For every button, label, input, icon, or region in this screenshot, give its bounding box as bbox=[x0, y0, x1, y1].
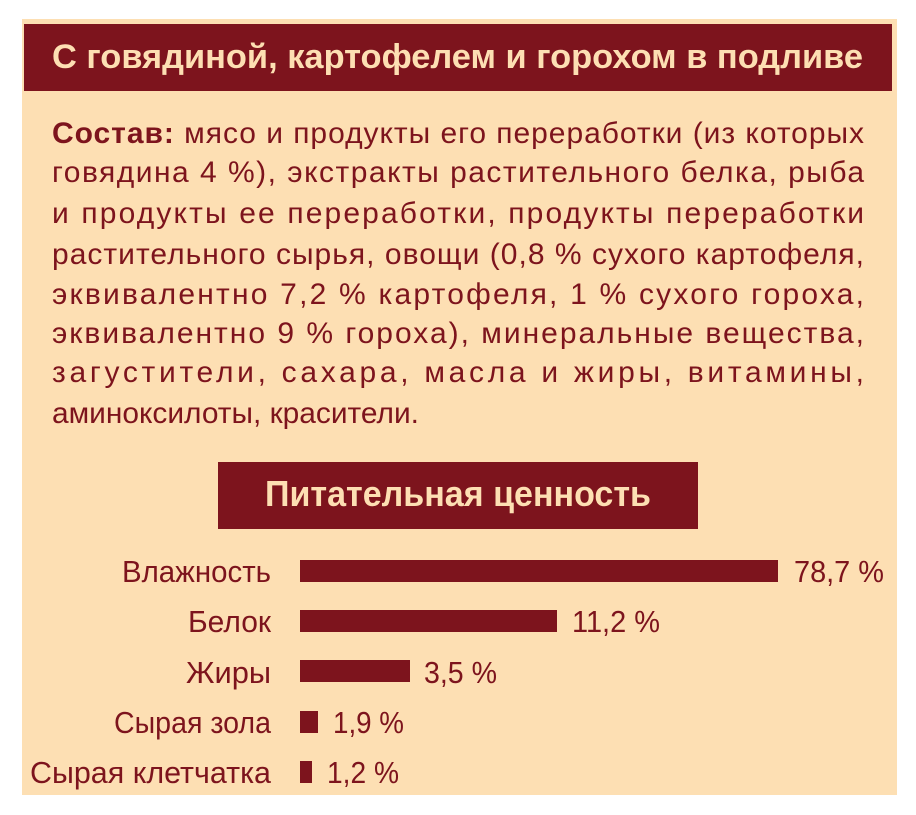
bar: moisture: 78,7 % bbox=[794, 554, 884, 589]
bar: protein: 11,2 % bbox=[572, 604, 660, 639]
bar: crude fibre: Сырая клетчатка bbox=[30, 755, 272, 790]
heading: nutritional value bbox=[218, 462, 698, 529]
text block: composition: аминоксилоты, красители. bbox=[52, 397, 419, 430]
text block: composition: эквивалентно 9 % гороха), минеральные вещества, bbox=[52, 317, 864, 350]
heading banner bbox=[24, 24, 892, 91]
bar: protein bbox=[188, 604, 660, 639]
bar: crude ash: 1,9 % bbox=[333, 705, 404, 740]
text block: composition: говядина 4 %), экстракты растительного белка, рыба bbox=[52, 156, 864, 189]
bar: moisture: Влажность bbox=[122, 554, 271, 589]
bar: fat: 3,5 % bbox=[424, 655, 497, 690]
bar: crude fibre: 1,2 % bbox=[327, 755, 399, 790]
bar: crude ash bbox=[114, 705, 404, 740]
bar: fat bbox=[186, 655, 497, 690]
bar chart bbox=[30, 554, 884, 790]
text block: composition: эквивалентно 7,2 % картофеля, 1 % сухого гороха, bbox=[52, 278, 864, 311]
bar: crude ash: Сырая зола bbox=[114, 705, 272, 740]
text block: composition: и продукты ее переработки, продукты переработки bbox=[52, 197, 864, 230]
bar: protein: Белок bbox=[188, 604, 271, 639]
bar: crude fibre bbox=[30, 755, 399, 790]
bar: moisture bbox=[122, 554, 884, 589]
text block: composition: Состав: мясо и продукты его переработки (из которых bbox=[52, 117, 864, 150]
bar: fat: Жиры bbox=[186, 655, 271, 690]
heading banner: С говядиной, картофелем и горохом в подливе bbox=[52, 38, 863, 76]
text block: composition: растительного сырья, овощи (0,8 % сухого картофеля, bbox=[52, 238, 864, 271]
text block: composition bbox=[52, 117, 864, 430]
text block: composition: загустители, сахара, масла и жиры, витамины, bbox=[52, 356, 864, 389]
heading: nutritional value: Питательная ценность bbox=[265, 473, 651, 514]
